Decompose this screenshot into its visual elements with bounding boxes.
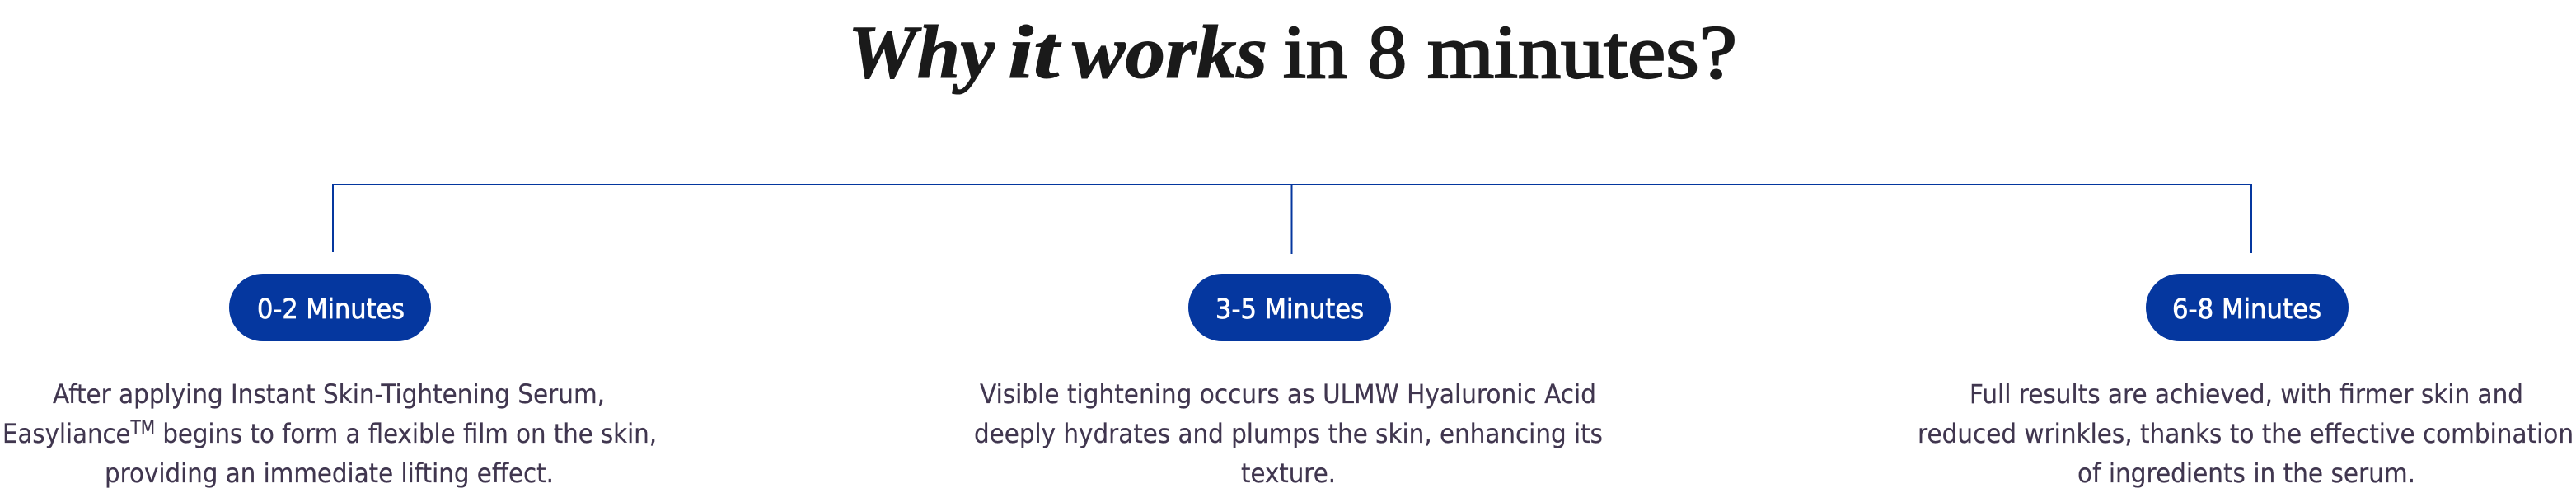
title: it [1008, 10, 1061, 94]
text: 3-5 minutes description [974, 378, 1603, 489]
panel: 6-8 minutes [1918, 274, 2574, 489]
text: 0-2 minutes description: Easyliance [2, 418, 143, 449]
title: works [1072, 10, 1267, 94]
connector lines [332, 184, 2252, 254]
pill: 3-5 Minutes: 3-5 Minutes [1215, 293, 1364, 325]
title [848, 10, 1737, 94]
pill: 3-5 Minutes [1188, 274, 1391, 341]
text: 0-2 minutes description [2, 378, 657, 489]
text: 6-8 minutes description: Full results are achieved, with firmer skin and [1969, 378, 2523, 410]
title: Why [848, 10, 995, 94]
text: 0-2 minutes description: TM [130, 418, 155, 439]
text: 0-2 minutes description: begins to form a flexible film on the skin, [155, 418, 657, 449]
pill: 6-8 Minutes [2146, 274, 2349, 341]
panel: 0-2 minutes [2, 274, 657, 489]
pill: 6-8 Minutes: 6-8 Minutes [2172, 293, 2321, 325]
text: 6-8 minutes description: of ingredients in the serum. [2077, 458, 2415, 489]
panel: 3-5 minutes [974, 274, 1603, 489]
text: 6-8 minutes description [1918, 378, 2574, 489]
text: 3-5 minutes description: texture. [1241, 458, 1336, 489]
text: 0-2 minutes description: providing an immediate lifting effect. [105, 458, 554, 489]
text: 3-5 minutes description: Visible tightening occurs as ULMW Hyaluronic Acid [980, 378, 1596, 410]
pill: 0-2 Minutes: 0-2 Minutes [257, 293, 405, 325]
text: 3-5 minutes description: deeply hydrates and plumps the skin, enhancing its [974, 418, 1603, 449]
pill: 0-2 Minutes [229, 274, 431, 341]
title: in [1283, 10, 1347, 94]
title: minutes? [1427, 10, 1737, 94]
title: 8 [1368, 10, 1407, 94]
text: 0-2 minutes description: After applying Instant Skin-Tightening Serum, [53, 378, 605, 410]
